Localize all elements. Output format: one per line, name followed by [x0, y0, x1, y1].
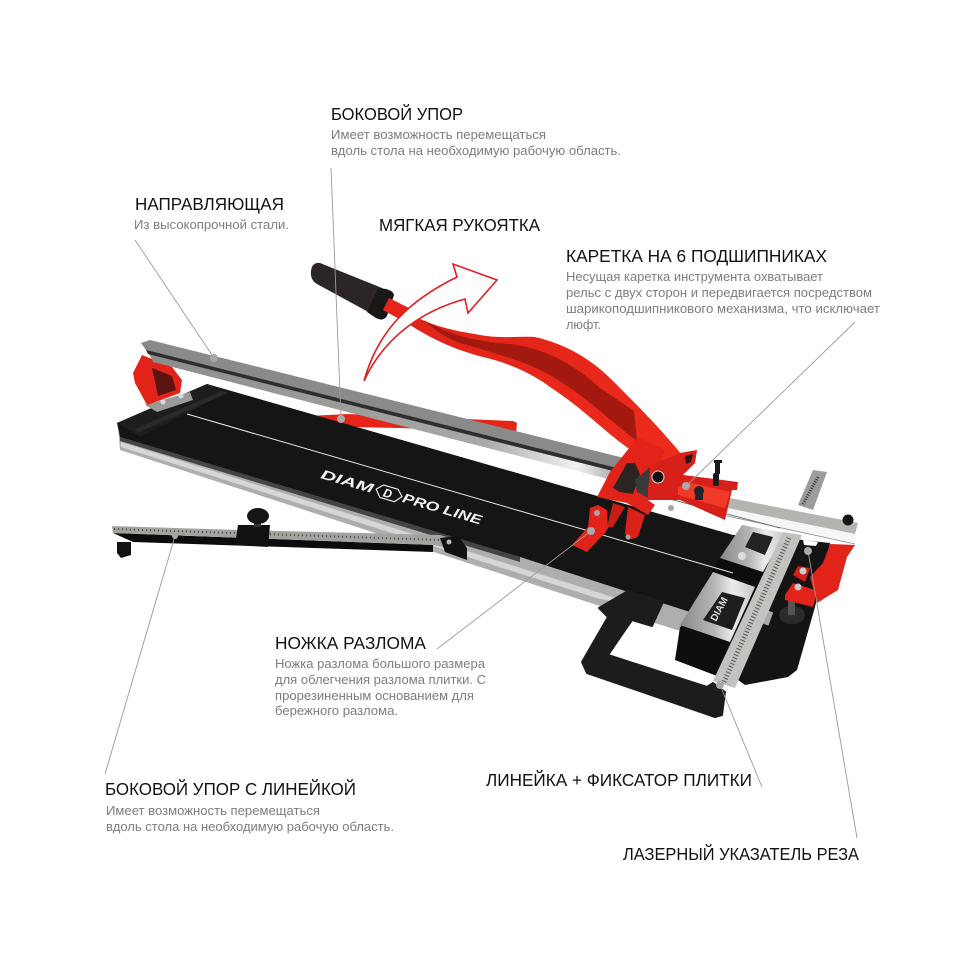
text: break foot: Ножка разлома большого размера	[275, 656, 486, 671]
callout line: ruler and tile clamp	[716, 681, 762, 787]
text: laser pointer: ЛАЗЕРНЫЙ УКАЗАТЕЛЬ РЕЗА	[623, 843, 859, 864]
text: break foot: прорезиненным основанием для	[275, 688, 474, 703]
callout line: laser pointer	[804, 547, 857, 838]
text: guide rail: НАПРАВЛЯЮЩАЯ	[135, 194, 284, 214]
text: ruler side stop: БОКОВОЙ УПОР С ЛИНЕЙКОЙ	[105, 778, 356, 799]
front ruler plate with logo: DIAM	[709, 596, 731, 623]
rail end knob	[842, 514, 854, 526]
DIAM PRO LINE logo on table: D	[382, 486, 394, 502]
rear measuring ruler	[798, 470, 827, 510]
left red rail holder	[133, 355, 182, 405]
front ruler plate with logo	[680, 572, 755, 642]
DIAM PRO LINE logo on table: DIAM	[319, 466, 377, 496]
callout line: ruler side stop	[105, 533, 178, 774]
text: carriage: шарикоподшипникового механизма, что исключает	[566, 301, 880, 316]
black area between plates	[680, 535, 790, 645]
tile cutter illustration	[112, 263, 858, 717]
text: carriage: рельс с двух сторон и передвигается посредством	[566, 285, 872, 300]
text: carriage: люфт.	[566, 317, 601, 332]
black table top	[117, 384, 733, 612]
text: break foot: НОЖКА РАЗЛОМА	[275, 633, 426, 653]
text: ruler side stop: вдоль стола на необходимую рабочую область.	[106, 819, 394, 834]
text: guide rail	[134, 194, 289, 232]
black right housing	[738, 537, 830, 685]
cutting slit line	[187, 414, 733, 573]
DIAM PRO LINE logo on table	[319, 466, 484, 528]
text: ruler side stop: Имеет возможность перемещаться	[106, 803, 320, 818]
callout line: carriage	[682, 322, 855, 490]
text: side stop: БОКОВОЙ УПОР	[331, 103, 463, 124]
fixing block	[675, 627, 733, 676]
break foot	[572, 503, 645, 552]
text: side stop	[331, 103, 621, 158]
carriage on six bearings	[597, 437, 738, 520]
long steel ruler	[713, 532, 802, 688]
text: side stop: вдоль стола на необходимую рабочую область.	[331, 143, 621, 158]
rear stop bracket	[117, 384, 228, 437]
black handle frame	[582, 591, 725, 717]
DIAM PRO LINE logo on table: PRO LINE	[401, 490, 484, 528]
text: carriage: КАРЕТКА НА 6 ПОДШИПНИКАХ	[566, 246, 827, 266]
text: guide rail: Из высокопрочной стали.	[134, 217, 289, 232]
callout line: break foot	[437, 527, 595, 649]
text: ruler side stop	[105, 778, 394, 834]
side stop with ruler	[112, 508, 467, 560]
text: side stop: Имеет возможность перемещаться	[331, 127, 546, 142]
red handle lever	[383, 298, 682, 480]
callout line: guide rail	[135, 240, 218, 362]
text: carriage: Несущая каретка инструмента охватывает	[566, 269, 823, 284]
text: ruler and clamp: ЛИНЕЙКА + ФИКСАТОР ПЛИТКИ	[486, 769, 752, 790]
text: soft handle: МЯГКАЯ РУКОЯТКА	[379, 215, 540, 235]
second ruler plate	[720, 525, 785, 572]
text: break foot	[275, 633, 486, 718]
soft rubber grip	[311, 263, 394, 320]
red right end block	[785, 544, 855, 607]
callout line: side stop	[331, 168, 345, 423]
red rear lever	[309, 414, 517, 433]
text: carriage	[566, 246, 880, 332]
text: break foot: бережного разлома.	[275, 703, 398, 718]
table side aluminium profile	[118, 425, 692, 634]
guide rail	[141, 340, 858, 544]
motion arrow	[364, 264, 497, 381]
text: break foot: для облегчения разлома плитки. С	[275, 672, 486, 687]
